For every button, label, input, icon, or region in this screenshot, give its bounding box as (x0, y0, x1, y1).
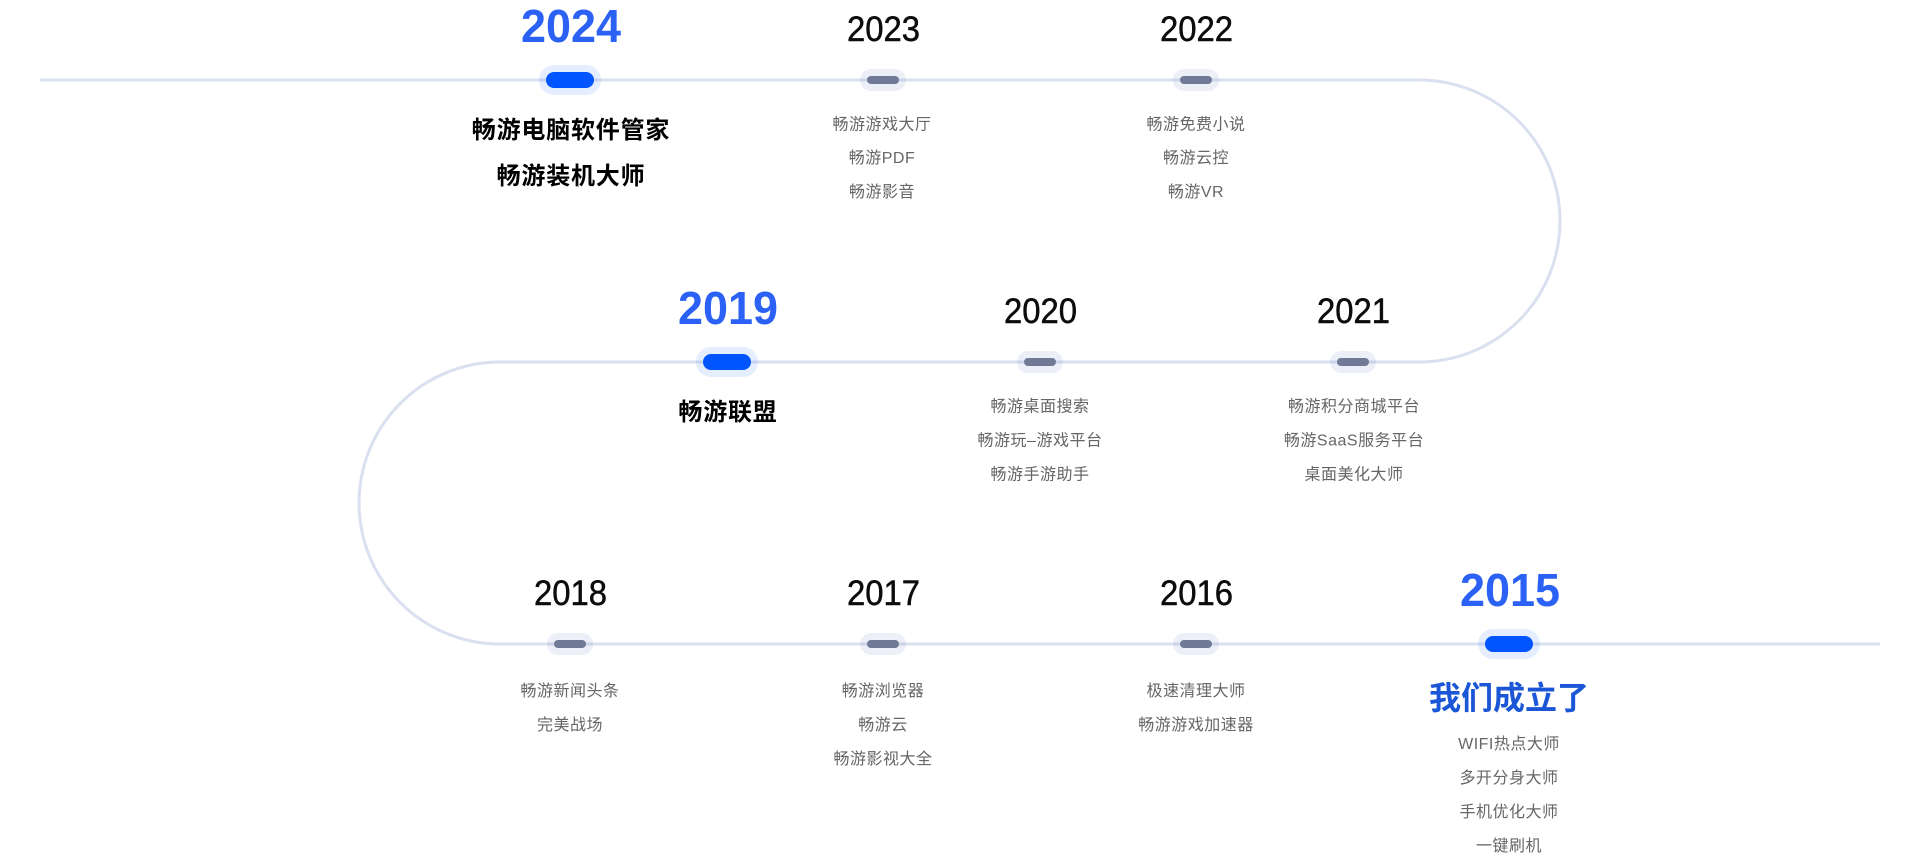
milestone 2021: 桌面美化大师 (1304, 466, 1404, 484)
milestone 2024: 畅游电脑软件管家 (472, 117, 670, 144)
milestone 2024 (472, 0, 670, 190)
milestone 2022: 2022 (1160, 10, 1233, 49)
milestone 2015: 手机优化大师 (1459, 803, 1559, 821)
milestone 2022: 畅游VR (1168, 183, 1224, 201)
milestone 2019 (678, 282, 778, 426)
milestone 2017: 2017 (847, 574, 920, 613)
milestone 2020: 畅游玩–游戏平台 (978, 432, 1102, 450)
milestone 2015: 我们成立了 (1429, 680, 1589, 716)
milestone 2024: 2024 (521, 0, 621, 52)
milestone 2015: 一键刷机 (1476, 837, 1542, 855)
milestone 2023: 畅游影音 (849, 183, 915, 201)
milestone 2018 (520, 574, 620, 734)
milestone 2015: WIFI热点大师 (1458, 735, 1560, 753)
milestone 2017: 畅游影视大全 (833, 750, 933, 768)
milestone 2022 (1146, 10, 1246, 201)
milestone 2018: 畅游新闻头条 (520, 682, 620, 700)
milestone 2018: 完美战场 (537, 716, 603, 734)
milestone 2017: 畅游云 (858, 716, 908, 734)
milestone 2023: 畅游游戏大厅 (832, 116, 932, 134)
milestone 2024: 畅游装机大师 (497, 163, 645, 190)
milestone 2020 (978, 292, 1102, 484)
milestone 2018: 2018 (534, 574, 607, 613)
milestone 2021: 2021 (1317, 292, 1390, 331)
milestone 2021 (1284, 292, 1424, 484)
serpentine timeline path (40, 80, 1880, 644)
milestone 2016: 极速清理大师 (1146, 682, 1246, 700)
milestone 2016: 2016 (1160, 574, 1233, 613)
milestone 2022: 畅游云控 (1163, 149, 1229, 167)
milestone 2019: 畅游联盟 (678, 399, 778, 426)
milestone 2019: 2019 (678, 282, 778, 334)
milestone 2015: 多开分身大师 (1459, 769, 1559, 787)
milestone 2016 (1138, 574, 1254, 734)
milestone 2021: 畅游SaaS服务平台 (1284, 432, 1424, 450)
milestone 2022: 畅游免费小说 (1146, 116, 1246, 134)
milestone 2020: 畅游桌面搜索 (990, 398, 1090, 416)
milestone 2020: 畅游手游助手 (990, 466, 1090, 484)
milestone 2023 (832, 10, 932, 201)
milestone 2021: 畅游积分商城平台 (1288, 398, 1420, 416)
milestone 2015: 2015 (1460, 564, 1560, 616)
milestone 2017: 畅游浏览器 (842, 682, 924, 700)
milestone 2023: 畅游PDF (849, 149, 915, 167)
milestone 2017 (833, 574, 933, 768)
milestone 2016: 畅游游戏加速器 (1138, 716, 1254, 734)
milestone 2015 (1429, 564, 1589, 855)
milestone 2020: 2020 (1004, 292, 1077, 331)
milestone 2023: 2023 (847, 10, 920, 49)
